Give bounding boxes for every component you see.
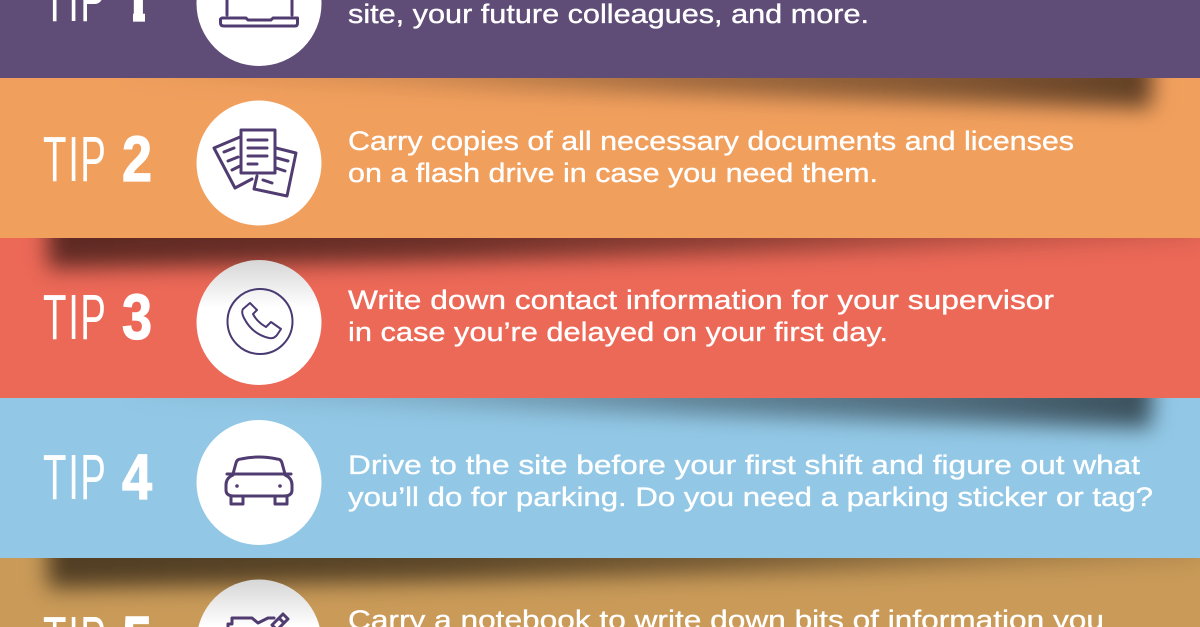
panel: tip 4	[0, 398, 1200, 558]
panel: tip 5	[0, 558, 1200, 627]
shadow: tip 4 band	[228, 398, 1168, 443]
tip 3 label: TIP	[43, 282, 106, 354]
tip 4 text: Drive to the site before your first shift and figure out what	[348, 450, 1141, 480]
tip 4 text	[348, 450, 1153, 512]
tip 2 text: Carry copies of all necessary documents and licenses	[348, 126, 1074, 156]
icon: laptop	[196, 0, 322, 66]
icon: documents	[196, 100, 322, 226]
tip 2 text: on a flash drive in case you need them.	[348, 158, 878, 188]
panel: tip 3	[0, 238, 1200, 398]
panel: tip 1	[0, 0, 1200, 78]
tip 5 label	[43, 603, 152, 627]
tip 3 text: in case you’re delayed on your first day.	[348, 317, 888, 347]
tip 4 label: 4	[122, 441, 152, 513]
shadow: tip 5 band	[32, 558, 1195, 603]
icon: notebook and pen	[196, 580, 322, 627]
tip 4 label	[43, 441, 152, 514]
shadow: tip 3 band	[32, 238, 1197, 284]
tip 3 text	[348, 285, 1054, 347]
tip 2 label: 2	[122, 123, 152, 195]
tip 1 label	[52, 0, 145, 22]
tip 4 label: TIP	[43, 442, 106, 514]
tip 4 text: you’ll do for parking. Do you need a parking sticker or tag?	[348, 482, 1153, 512]
tip 2 label	[43, 123, 152, 196]
icon: car	[196, 420, 322, 545]
panel: tip 2	[0, 78, 1200, 238]
tip 2 text	[348, 126, 1074, 188]
tip 2 label: TIP	[43, 124, 106, 196]
shadow: tip 2 band	[208, 78, 1168, 124]
tip 3 text: Write down contact information for your supervisor	[348, 285, 1054, 315]
icon: phone	[196, 260, 322, 385]
tip 3 label	[43, 281, 152, 354]
tip 3 label: 3	[122, 281, 152, 353]
